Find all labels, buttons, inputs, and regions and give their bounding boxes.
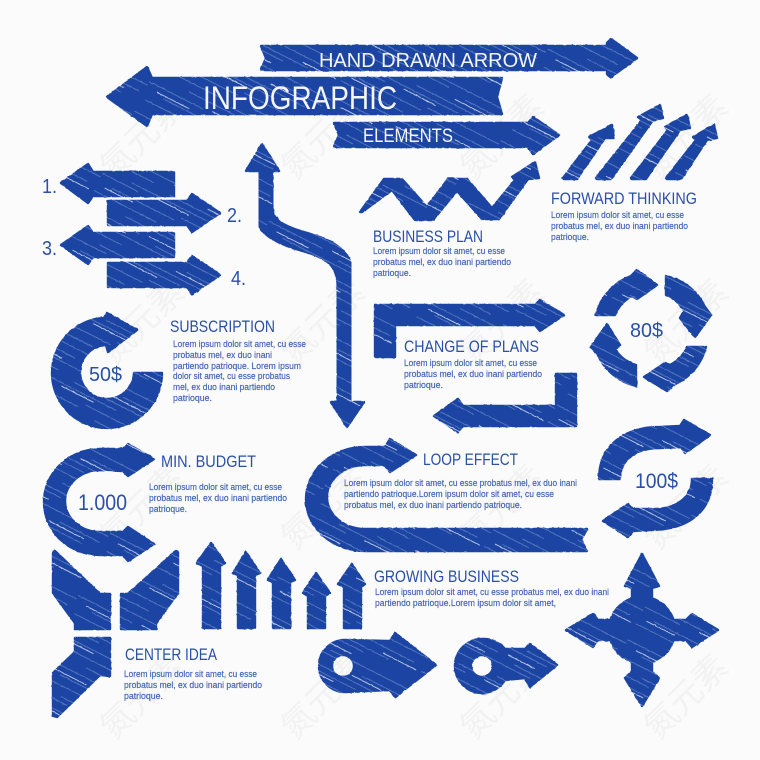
arrow 2: 2. bbox=[227, 205, 242, 227]
text: growing business: Lorem ipsum dolor sit amet, cu esse probatus mel, ex duo inani bbox=[375, 587, 609, 597]
watermark: 氮元素 bbox=[274, 88, 373, 187]
50$ subscription circular arrow bbox=[52, 313, 162, 428]
text: loop effect bbox=[344, 450, 577, 510]
text: min. budget: patrioque. bbox=[149, 504, 187, 514]
watermark: 氮元素 bbox=[274, 458, 373, 557]
text: center idea bbox=[124, 645, 262, 701]
text: subscription: patrioque. bbox=[173, 393, 212, 403]
text: business plan: patrioque. bbox=[373, 268, 411, 278]
growing business up arrows bbox=[197, 543, 365, 628]
text: change of plans: CHANGE OF PLANS bbox=[404, 337, 539, 356]
title banner: elements bbox=[334, 117, 559, 154]
text: min. budget bbox=[149, 452, 287, 514]
text: loop effect: LOOP EFFECT bbox=[423, 450, 518, 469]
text: change of plans: patrioque. bbox=[404, 380, 443, 390]
text: min. budget: Lorem ipsum dolor sit amet, cu esse bbox=[149, 482, 282, 492]
four way cross arrow bbox=[566, 554, 718, 706]
text: forward thinking: patrioque. bbox=[551, 232, 589, 242]
title banner: hand drawn arrow: HAND DRAWN ARROW bbox=[319, 50, 537, 72]
text: forward thinking bbox=[551, 189, 697, 242]
watermark: 氮元素 bbox=[453, 273, 552, 372]
change of plans bottom arrow bbox=[434, 374, 576, 432]
arrow 4: 4. bbox=[231, 268, 246, 290]
center idea arrows bbox=[53, 551, 178, 717]
min. budget double arrow bbox=[44, 444, 154, 561]
text: forward thinking: probatus mel, ex duo inani partiendo bbox=[551, 221, 688, 231]
text: business plan: probatus mel, ex duo inani partiendo bbox=[373, 257, 511, 267]
watermark: 氮元素 bbox=[93, 458, 192, 557]
title banner: elements: ELEMENTS bbox=[363, 126, 453, 147]
text: growing business: GROWING BUSINESS bbox=[374, 567, 519, 586]
text: change of plans bbox=[404, 337, 542, 390]
watermark: 氮元素 bbox=[93, 88, 192, 187]
text: center idea: CENTER IDEA bbox=[125, 645, 218, 664]
arrow 1: 1. bbox=[42, 176, 57, 198]
text: loop effect: Lorem ipsum dolor sit amet, cu esse probatus mel, ex duo inani bbox=[344, 478, 577, 488]
watermark: 氮元素 bbox=[453, 458, 552, 557]
text: min. budget: probatus mel, ex duo inani partiendo bbox=[149, 493, 287, 503]
watermark bbox=[93, 88, 736, 747]
text: growing business: partiendo patrioque.Lorem ipsum dolor sit amet, bbox=[375, 598, 556, 608]
100$ circular arrows: 100$ bbox=[635, 470, 678, 493]
watermark: 氮元素 bbox=[274, 273, 373, 372]
text: subscription: SUBSCRIPTION bbox=[170, 317, 275, 336]
title banner: infographic: INFOGRAPHIC bbox=[203, 80, 397, 116]
text: forward thinking: Lorem ipsum dolor sit amet, cu esse bbox=[551, 210, 684, 220]
watermark: 氮元素 bbox=[274, 648, 373, 747]
50$ subscription circular arrow: 50$ bbox=[89, 364, 122, 386]
keyhole arrow large bbox=[319, 633, 436, 697]
text: subscription: partiendo patrioque. Lorem ipsum bbox=[173, 361, 301, 371]
80$ circular arrows: 80$ bbox=[630, 320, 663, 342]
watermark: 氮元素 bbox=[453, 88, 552, 187]
winding long arrow bbox=[246, 144, 364, 427]
watermark: 氮元素 bbox=[637, 88, 736, 187]
text: subscription: mel, ex duo inani partiendo bbox=[173, 382, 275, 392]
text: loop effect: probatus mel, ex duo inani partiendo patrioque. bbox=[344, 500, 522, 510]
text: subscription: dolor sit amet, cu esse probatus bbox=[173, 371, 291, 381]
text: subscription: probatus mel, ex duo inani bbox=[173, 350, 272, 360]
min. budget double arrow: 1.000 bbox=[78, 490, 127, 515]
text: center idea: probatus mel, ex duo inani partiendo bbox=[124, 680, 262, 690]
loop effect arrow bbox=[306, 439, 587, 551]
text: business plan: BUSINESS PLAN bbox=[373, 227, 483, 246]
text: change of plans: Lorem ipsum dolor sit amet, cu esse bbox=[404, 358, 537, 368]
text: forward thinking: FORWARD THINKING bbox=[551, 189, 697, 208]
80$ circular arrows bbox=[591, 270, 711, 391]
100$ circular arrows bbox=[599, 420, 712, 537]
watermark: 氮元素 bbox=[637, 273, 736, 372]
arrow 1 bbox=[42, 164, 174, 203]
text: business plan: Lorem ipsum dolor sit amet, cu esse bbox=[373, 246, 505, 256]
business plan zigzag arrow bbox=[360, 162, 539, 220]
change of plans top arrow bbox=[375, 300, 564, 357]
text: center idea: patrioque. bbox=[124, 691, 163, 701]
text: center idea: Lorem ipsum dolor sit amet, cu esse bbox=[124, 669, 257, 679]
text: loop effect: partiendo patrioque.Lorem ipsum dolor sit amet, cu esse bbox=[344, 489, 554, 499]
arrow 2 bbox=[108, 194, 242, 232]
arrow 3 bbox=[42, 226, 174, 264]
title banner: hand drawn arrow bbox=[261, 39, 637, 77]
text: change of plans: probatus mel, ex duo inani partiendo bbox=[404, 369, 542, 379]
arrow 3: 3. bbox=[42, 238, 57, 260]
watermark: 氮元素 bbox=[93, 648, 192, 747]
watermark: 氮元素 bbox=[93, 273, 192, 372]
text: business plan bbox=[373, 227, 511, 278]
watermark: 氮元素 bbox=[453, 648, 552, 747]
arrow 4 bbox=[108, 256, 246, 294]
text: growing business bbox=[374, 567, 609, 608]
title banner: infographic bbox=[107, 67, 502, 126]
forward thinking arrows bbox=[563, 105, 717, 179]
watermark: 氮元素 bbox=[637, 648, 736, 747]
watermark: 氮元素 bbox=[637, 458, 736, 557]
text: subscription bbox=[170, 317, 306, 403]
text: min. budget: MIN. BUDGET bbox=[161, 452, 256, 471]
text: subscription: Lorem ipsum dolor sit amet, cu esse bbox=[173, 339, 306, 349]
numbered arrows list bbox=[42, 164, 246, 294]
keyhole arrow small bbox=[455, 639, 557, 693]
